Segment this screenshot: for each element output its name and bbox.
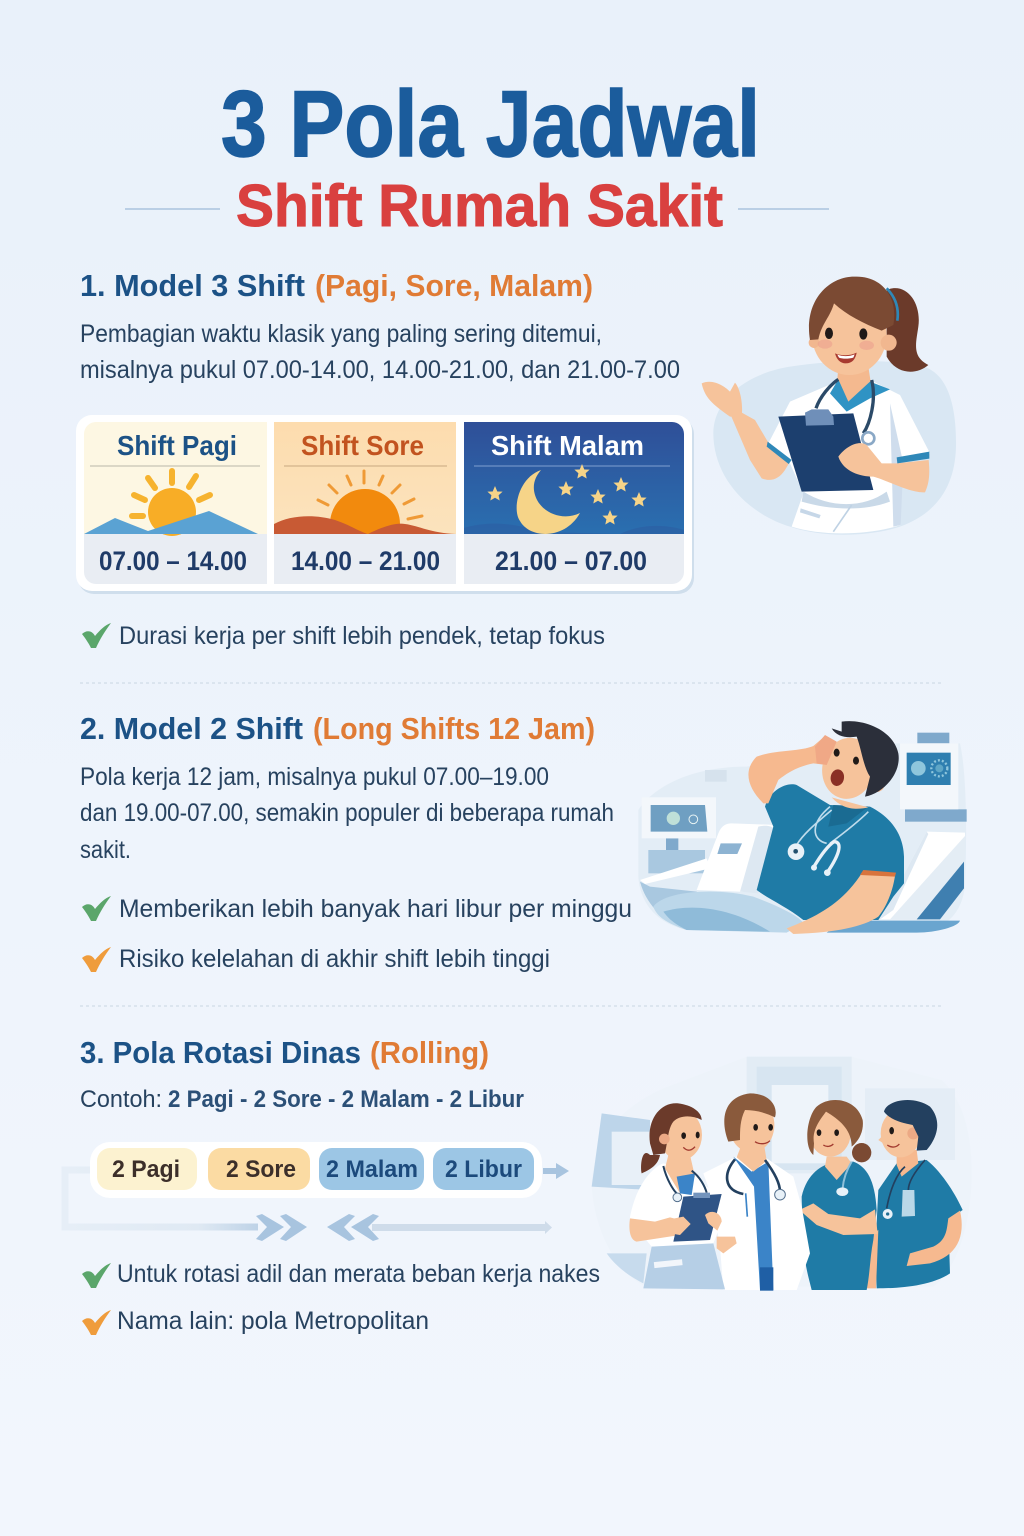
diagram: rotation flow arrows: [65, 1163, 569, 1241]
heading: model 3 shift: [80, 268, 593, 303]
text: model 2 shift description: sakit.: [80, 836, 131, 864]
subtitle with side rules: Shift Rumah Sakit: [236, 173, 723, 239]
illustration: nurse with clipboard: [702, 277, 956, 535]
panel: rotation pills: [90, 1142, 542, 1198]
person: man in teal scrubs: [866, 1100, 963, 1288]
check item: nama lain: Nama lain: pola Metropolitan: [117, 1307, 429, 1335]
heading: model 3 shift: 1. Model 3 Shift: [80, 268, 305, 303]
card: shift pagi: [84, 422, 267, 584]
card: shift malam: 21.00 – 07.00: [495, 546, 647, 576]
card: shift pagi: Shift Pagi: [117, 430, 237, 461]
pill: 2 libur: 2 Libur: [445, 1156, 522, 1183]
title: 3 Pola Jadwal: [221, 71, 760, 176]
pill: 2 malam: 2 Malam: [326, 1156, 418, 1183]
card: shift malam: Shift Malam: [491, 430, 644, 461]
check item: hari libur: Memberikan lebih banyak hari libur per minggu: [119, 895, 632, 923]
text: model 2 shift description: Pola kerja 12 jam, misalnya pukul 07.00–19.00: [80, 763, 549, 791]
card: shift sore: 14.00 – 21.00: [291, 546, 440, 576]
illustration: healthcare team: [592, 1057, 972, 1291]
heading: pola rotasi dinas: 3. Pola Rotasi Dinas: [80, 1035, 361, 1070]
divider: [80, 682, 944, 684]
text: model 3 shift description: misalnya pukul 07.00-14.00, 14.00-21.00, dan 21.00-7.00: [80, 356, 680, 384]
check item: rotasi adil: Untuk rotasi adil dan merata beban kerja nakes: [117, 1260, 600, 1288]
person: doctor in white coat: [703, 1093, 810, 1291]
illustration: tired health worker on bed: [638, 721, 967, 934]
person: nurse with clipboard: [629, 1103, 737, 1289]
text: rotation example: 2 Pagi - 2 Sore - 2 Malam - 2 Libur: [168, 1086, 524, 1113]
pill: 2 pagi: [97, 1148, 197, 1190]
person: woman in teal scrubs: [799, 1100, 878, 1290]
heading: model 2 shift: (Long Shifts 12 Jam): [313, 711, 595, 746]
heading: pola rotasi dinas: (Rolling): [370, 1035, 489, 1070]
infographic canvas: [66, 87, 967, 1335]
pill: 2 sore: 2 Sore: [226, 1156, 296, 1183]
divider: [80, 1005, 944, 1007]
heading: model 2 shift: 2. Model 2 Shift: [80, 711, 303, 746]
pill: 2 libur: [433, 1148, 534, 1190]
card: shift sore: Shift Sore: [301, 430, 424, 461]
card: shift malam: [464, 422, 684, 584]
text: model 2 shift description: [80, 763, 614, 864]
check item: risiko kelelahan: Risiko kelelahan di akhir shift lebih tinggi: [119, 945, 550, 973]
heading: model 2 shift: [80, 711, 595, 746]
text: model 2 shift description: dan 19.00-07.00, semakin populer di beberapa rumah: [80, 799, 614, 827]
panel: shift cards: [76, 415, 694, 594]
heading: model 3 shift: (Pagi, Sore, Malam): [315, 268, 593, 303]
text: rotation example: Contoh:: [80, 1086, 162, 1113]
pill: 2 sore: [208, 1148, 310, 1190]
pill: 2 pagi: 2 Pagi: [112, 1156, 180, 1183]
card: shift pagi: 07.00 – 14.00: [99, 546, 247, 576]
card: shift sore: [274, 422, 456, 584]
pill: 2 malam: [319, 1148, 424, 1190]
text: model 3 shift description: [80, 320, 680, 384]
text: model 3 shift description: Pembagian waktu klasik yang paling sering ditemui,: [80, 320, 602, 348]
check item: durasi kerja: Durasi kerja per shift lebih pendek, tetap fokus: [119, 622, 605, 650]
